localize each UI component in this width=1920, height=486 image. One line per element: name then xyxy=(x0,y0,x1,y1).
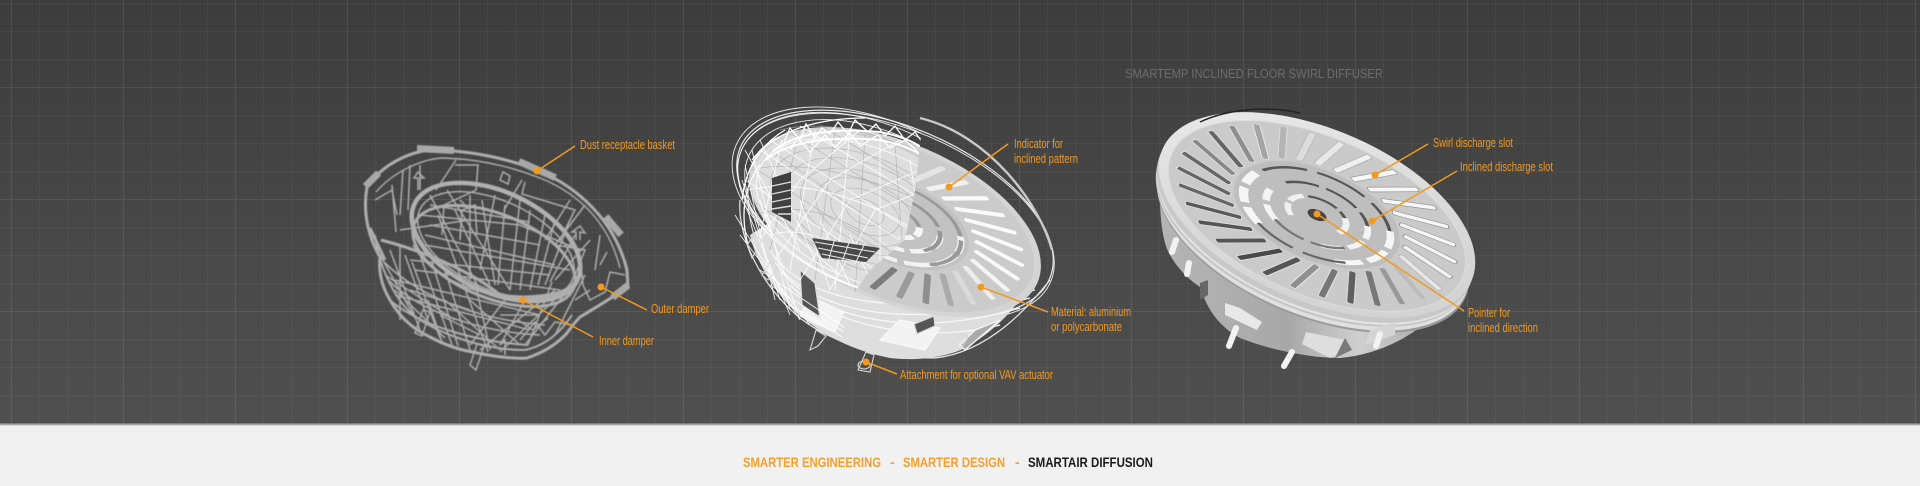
callout: outer damper: Outer damper xyxy=(651,302,709,316)
outer wire outline xyxy=(707,68,1084,361)
callout: dust receptacle basket: Dust receptacle basket xyxy=(580,138,675,152)
body cut-outs xyxy=(1200,280,1395,358)
swirl discharge slots xyxy=(1149,86,1485,344)
callout: material xyxy=(978,284,1131,334)
footer slogan: - xyxy=(1015,454,1020,470)
callout: inclined discharge slot: Inclined discharge slot xyxy=(1460,160,1553,174)
solid disc with slots xyxy=(721,88,1069,356)
title: product name: SMARTEMP INCLINED FLOOR SWIRL DIFFUSER xyxy=(1125,66,1383,81)
callout: pointer for inclined direction xyxy=(1314,210,1538,335)
callout: dust receptacle basket xyxy=(534,138,675,174)
footer slogan: SMARTER DESIGN xyxy=(903,454,1005,470)
wireframe diffuser: internal dampers xyxy=(363,145,630,370)
footer band xyxy=(0,423,1920,486)
disc top xyxy=(1129,70,1505,360)
body xyxy=(1160,195,1445,358)
mid-render diffuser: half wireframe, half solid xyxy=(732,106,1055,373)
body of diffuser xyxy=(750,190,1038,359)
footer slogan: - xyxy=(890,454,895,470)
callout: VAV actuator attachment xyxy=(862,358,1053,382)
callout: pointer for inclined direction: Pointer for xyxy=(1468,306,1510,320)
callout: inclined discharge slot xyxy=(1368,160,1553,224)
callout: inner damper: Inner damper xyxy=(599,334,654,348)
body bands and cut-outs xyxy=(770,250,1035,350)
mounting pegs xyxy=(747,235,968,372)
mounting pegs xyxy=(1172,240,1380,366)
callout: swirl discharge slot xyxy=(1372,136,1513,178)
callout: swirl discharge slot: Swirl discharge slot xyxy=(1433,136,1513,150)
callout: inner damper xyxy=(520,296,654,348)
wire overlay on left half xyxy=(732,106,922,338)
inclined discharge rings xyxy=(1218,139,1416,291)
stacked rings under disc xyxy=(1126,75,1503,374)
callout: material: Material: aluminium xyxy=(1051,305,1131,319)
footer slogan: SMARTER ENGINEERING xyxy=(743,454,881,470)
callout: material: or polycarbonate xyxy=(1051,320,1122,334)
callout: indicator for inclined pattern: Indicator for xyxy=(1014,137,1063,151)
callout: pointer for inclined direction: inclined direction xyxy=(1468,321,1538,335)
callout: indicator for inclined pattern: inclined pattern xyxy=(1014,152,1078,166)
footer slogan xyxy=(743,454,1153,470)
callout: outer damper xyxy=(598,284,709,316)
footer slogan: SMARTAIR DIFFUSION xyxy=(1028,454,1153,470)
callout: VAV actuator attachment: Attachment for optional VAV actuator xyxy=(900,368,1053,382)
callout: indicator for inclined pattern xyxy=(946,137,1078,190)
solid diffuser render xyxy=(1126,70,1505,374)
